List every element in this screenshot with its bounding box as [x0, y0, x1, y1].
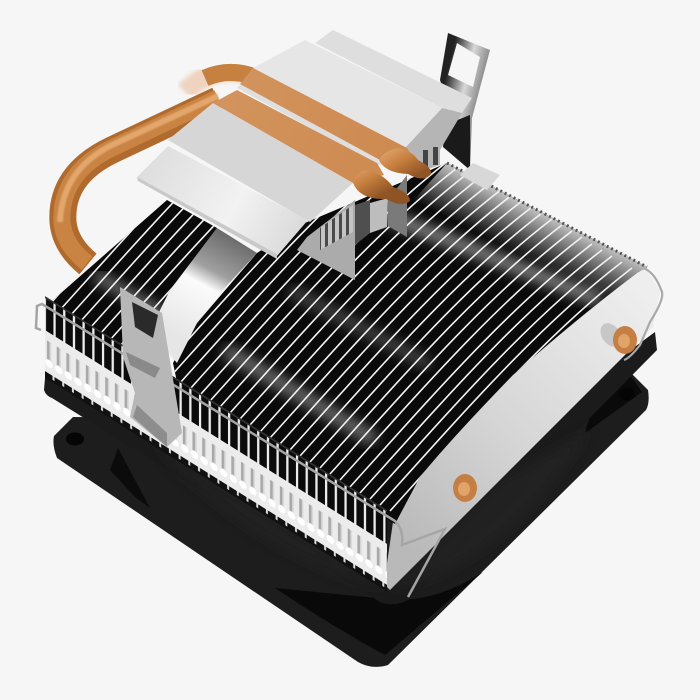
right-hand fins light — [370, 198, 388, 233]
fan interior: bottom shadow — [275, 572, 483, 655]
rear fin tips — [447, 163, 647, 267]
fan rotor ring — [150, 430, 590, 590]
aluminium heat sink — [137, 30, 472, 280]
front mounting clip — [120, 287, 182, 447]
mounting hole left — [66, 432, 84, 446]
fan bottom plate — [53, 372, 649, 667]
rear pipe tip — [379, 148, 431, 178]
clip window — [132, 302, 158, 338]
upper top face — [253, 40, 442, 148]
rear mounting clip — [440, 33, 490, 170]
chrome strip in fin gap — [150, 228, 257, 363]
flange — [137, 146, 308, 258]
right-hand fins dark — [355, 200, 370, 245]
front fin block — [297, 200, 355, 280]
rear light plate — [460, 163, 500, 190]
front pipe tip — [353, 170, 410, 204]
copper stud: bottom — [438, 469, 477, 502]
front fin comb — [320, 205, 353, 250]
right-hand fins shadow — [388, 175, 407, 237]
retention wire: rear right — [624, 268, 662, 360]
front flat pipe — [213, 90, 384, 183]
clip window — [448, 43, 480, 87]
mounting hole right — [619, 388, 635, 400]
fan upper frame — [44, 332, 657, 604]
fin highlights and white fin edges — [120, 103, 647, 511]
retention wire: front — [36, 304, 445, 597]
fin stack: left section — [53, 200, 217, 344]
rear fins — [405, 108, 462, 170]
fin stack: main section — [173, 163, 647, 524]
flange lip — [137, 177, 277, 259]
copper stud: right — [596, 319, 637, 354]
lower top face — [168, 103, 353, 222]
fan assembly — [44, 332, 657, 667]
back plate — [315, 30, 472, 113]
front comb of fins — [45, 296, 387, 592]
fan interior: right shadow — [585, 372, 642, 433]
heat pipe: curved sections — [60, 72, 252, 264]
silver end panel — [384, 262, 660, 590]
front pipe outer — [63, 100, 218, 264]
rear flat pipe — [240, 68, 412, 160]
centre strip — [237, 82, 405, 165]
flattened copper pipes — [213, 68, 431, 204]
fan interior: left shadow — [110, 448, 150, 508]
rear pipe bend — [185, 72, 252, 92]
